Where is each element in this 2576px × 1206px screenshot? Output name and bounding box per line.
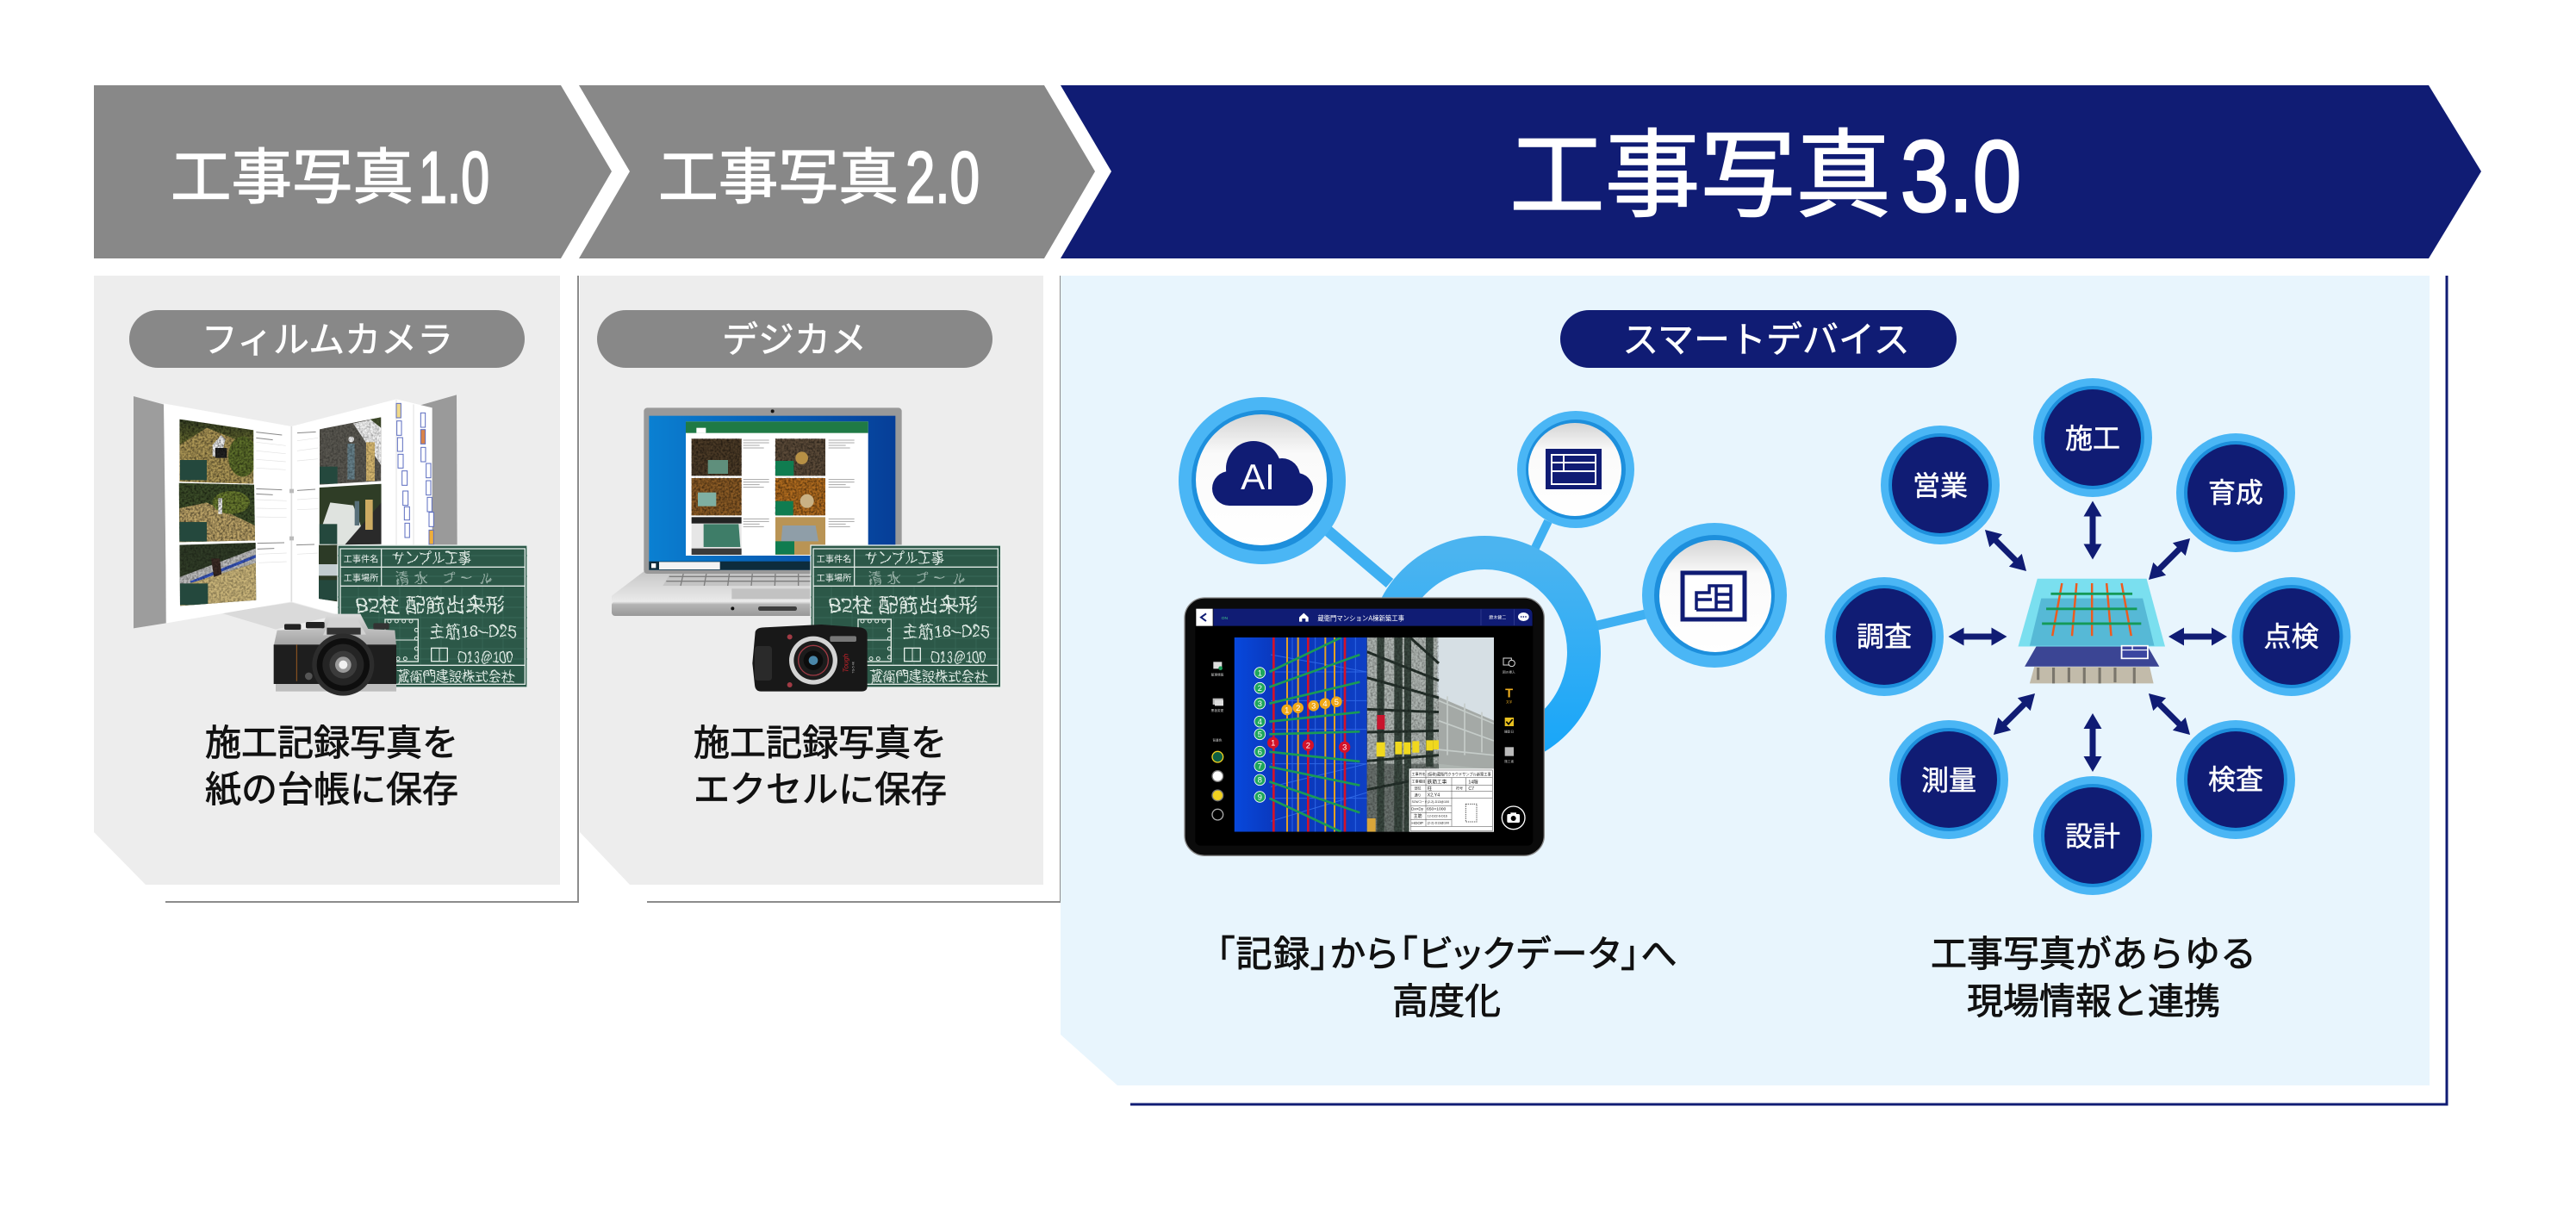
BIM overlay side [1235, 637, 1367, 832]
app header bar [1196, 609, 1533, 626]
photo data sheet: X2,Y4 [1428, 793, 1440, 799]
illustration: chalkboard 2: 工事場所 [817, 572, 851, 583]
photo data sheet: 工事件名 [1412, 771, 1426, 776]
illustration: chalkboard 1: 蔵衛門建設株式会社 [396, 669, 514, 685]
caption: エクセルに保存: 施工記録写真を [694, 723, 947, 763]
illustration: chalkboard 1: 清水 プール [395, 571, 493, 587]
illustration: chalkboard 1: 主筋18−D25 [429, 623, 517, 642]
site photo side [1367, 637, 1494, 832]
node: 施工 [2033, 378, 2152, 497]
illustration: chalkboard 1: サンプル工事 [392, 550, 471, 567]
illustration: chalkboard 2: サンプル工事 [865, 550, 944, 567]
pill: スマートデバイス [1560, 310, 1957, 368]
illustration: chalkboard 2: 主筋18−D25 [902, 623, 990, 642]
illustration: chalkboard 2: B2柱 配筋出来形 [828, 594, 979, 616]
node: 設計: 設計 [2065, 821, 2120, 852]
chevron: 工事写真2.0: 2.0 [905, 137, 980, 218]
photo data sheet: SOWコード [1412, 800, 1428, 804]
photo data sheet: Dx×Dy [1411, 807, 1424, 811]
illustration: chalkboard 1: 工事場所 [344, 572, 378, 583]
caption: 現場情報と連携: 工事写真があらゆる [1931, 934, 2256, 974]
right toolbar [1503, 658, 1515, 763]
node: 調査 [1825, 577, 1944, 696]
caption: 紙の台帳に保存: 紙の台帳に保存 [205, 769, 458, 810]
rebar number markers: 4 [1322, 699, 1328, 708]
node: 営業: 営業 [1913, 470, 1968, 501]
rebar number markers: 2 [1306, 741, 1310, 749]
right toolbar: 撮影日 [1504, 730, 1514, 734]
photo data sheet: (仮称)蔵衛門クラウドサンプル新築工事 [1428, 771, 1491, 777]
caption: 現場情報と連携 [1931, 934, 2256, 1022]
node: 調査: 調査 [1857, 621, 1912, 652]
camera shutter button [1502, 806, 1525, 830]
rebar number markers: 3 [1311, 702, 1316, 711]
app header bar: ON [1222, 616, 1229, 621]
illustration: chalkboard 1: D13@100 [457, 648, 513, 666]
panel: 工事写真1.0 film camera [94, 276, 578, 902]
left toolbar: 背景色 [1213, 737, 1223, 742]
pill: スマートデバイス: スマートデバイス [1622, 320, 1910, 360]
caption: エクセルに保存: エクセルに保存 [694, 769, 947, 810]
node: 育成: 育成 [2208, 477, 2263, 508]
caption: 高度化: 「記録」から「ビックデータ」へ [1216, 934, 1677, 974]
device: tablet with BIM photo app [1185, 598, 1544, 855]
photo data sheet: 部位 [1415, 786, 1422, 791]
photo data sheet: 柱 [1428, 785, 1433, 792]
caption: 紙の台帳に保存 [205, 723, 458, 810]
node: 測量: 測量 [1921, 765, 1976, 796]
node: 点検: 点検 [2263, 621, 2319, 652]
node: 設計 [2033, 776, 2152, 895]
rebar number markers: 6 [1258, 748, 1262, 756]
rebar number markers: 1 [1258, 668, 1262, 677]
right toolbar: 文字 [1506, 699, 1513, 704]
illustration: chalkboard 1: B2柱 配筋出来形 [355, 594, 506, 616]
illustration: chalkboard 2: 蔵衛門建設株式会社 [869, 669, 987, 685]
rebar number markers: 8 [1258, 776, 1262, 785]
rebar number markers: 5 [1258, 730, 1262, 739]
illustration: photo ledger binder [134, 395, 457, 630]
chevron: 工事写真3.0 [1061, 85, 2481, 258]
panel: 工事写真2.0 digital camera [578, 276, 1061, 902]
pill: デジカメ [597, 310, 992, 368]
node: 施工: 施工 [2065, 423, 2120, 454]
pill: フィルムカメラ [129, 310, 525, 368]
illustration: chalkboard 1: 工事件名 [344, 554, 378, 565]
right toolbar: T [1505, 687, 1513, 700]
photo data sheet: C7 [1468, 786, 1474, 792]
icon: floor plan [1642, 523, 1787, 668]
arrows: two-way links [1949, 501, 2227, 772]
icon: film camera [274, 614, 396, 696]
chevron: 工事写真3.0: 3.0 [1901, 120, 2021, 233]
rebar number markers: 2 [1296, 704, 1300, 712]
chevron: 工事写真1.0: 1.0 [419, 137, 489, 218]
left toolbar [1211, 662, 1224, 820]
illustration: laptop with Excel sheet [612, 407, 924, 616]
rebar number markers: 7 [1258, 762, 1262, 771]
icon: compact digital camera: Tough [842, 653, 849, 673]
node: 測量 [1889, 720, 2008, 839]
illustration: chalkboard 2: 清水 プール [868, 571, 966, 587]
rebar number markers: 1 [1271, 739, 1275, 748]
illustration: chalkboard 2: 工事件名 [817, 554, 851, 565]
photo data sheet: 工事種目 [1412, 779, 1426, 784]
diagram: photo data hub [1825, 378, 2350, 895]
icon: compact digital camera: TG-5 4K [852, 661, 856, 674]
node: 検査: 検査 [2208, 764, 2263, 795]
rebar number markers: 5 [1335, 698, 1339, 706]
node: 育成 [2176, 433, 2295, 552]
panel: 工事写真3.0 smart devices [1061, 276, 2447, 1104]
diagram: tablet linked to AI, form and drawing [1179, 397, 1787, 855]
hub: stacked data layers [2018, 579, 2165, 683]
chevron: 工事写真1.0 [94, 85, 612, 258]
photo data sheet: (2-2)-D13@100 [1428, 822, 1449, 825]
caption: エクセルに保存 [694, 723, 947, 810]
photo data sheet: 鉄筋工事 [1428, 778, 1447, 785]
photo data sheet: 14階 [1468, 778, 1478, 785]
node: 点検 [2231, 577, 2350, 696]
left toolbar: 黒板変更 [1211, 708, 1224, 712]
rebar number markers: 3 [1342, 743, 1347, 752]
photo data sheet [1409, 768, 1494, 832]
chevron: 工事写真2.0 [579, 85, 1095, 258]
photo data sheet: HOOP [1411, 821, 1423, 825]
caption: 紙の台帳に保存: 施工記録写真を [205, 723, 458, 763]
photo data sheet: 符号 [1456, 786, 1463, 791]
right toolbar: 施工者 [1504, 759, 1514, 763]
rebar number markers: 4 [1258, 718, 1262, 726]
rebar number markers: 1 [1285, 706, 1289, 714]
illustration: chalkboard 2 [811, 545, 1001, 687]
icon: AI cloud [1179, 397, 1346, 564]
photo data sheet: 主筋 [1414, 813, 1422, 819]
photo data sheet: 12-D22-6-D16 [1428, 815, 1447, 818]
right toolbar: 図の挿入 [1503, 669, 1515, 674]
rebar number markers [1254, 668, 1350, 802]
pill: デジカメ: デジカメ [722, 320, 867, 360]
app header bar: 蔵衛門マンションA棟新築工事 [1317, 613, 1404, 622]
icon: AI cloud: AI [1241, 457, 1275, 497]
icon: compact digital camera [752, 625, 868, 692]
rebar number markers: 9 [1258, 793, 1262, 801]
photo data sheet: (2-2)-D13@100 [1428, 800, 1449, 804]
illustration: chalkboard 1 [338, 545, 527, 687]
icon: form sheet [1517, 411, 1634, 528]
pill: フィルムカメラ: フィルムカメラ [202, 320, 453, 360]
chevron: 工事写真3.0: 工事写真 [1509, 122, 1891, 229]
caption: 現場情報と連携: 現場情報と連携 [1967, 981, 2220, 1022]
illustration: chalkboard 2: D13@100 [930, 648, 986, 666]
photo data sheet: 通り [1415, 792, 1422, 797]
photo data sheet: 650×1000 [1427, 807, 1447, 812]
chevron: 工事写真1.0: 工事写真 [171, 144, 414, 211]
node: 検査 [2176, 720, 2295, 839]
left toolbar: 整理情報 [1211, 673, 1224, 677]
app header bar: 鈴木健二 [1489, 615, 1506, 621]
rebar number markers: 2 [1258, 684, 1262, 693]
rebar number markers: 3 [1258, 699, 1262, 708]
node: 営業 [1881, 426, 2000, 544]
caption: 高度化 [1216, 934, 1677, 1022]
caption: 高度化: 高度化 [1392, 981, 1501, 1022]
chevron: 工事写真2.0: 工事写真 [658, 144, 899, 211]
